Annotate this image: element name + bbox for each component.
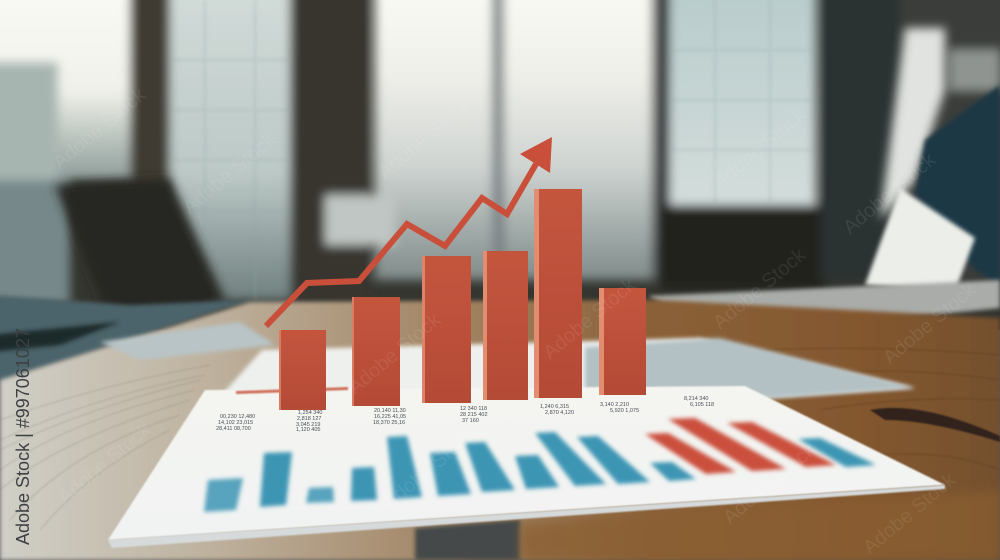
watermark: Adobe Stock — [179, 128, 281, 219]
watermark: Adobe Stock — [539, 273, 641, 364]
paper table of figures: 28 215 402 — [460, 412, 488, 418]
wood knot — [870, 408, 1000, 442]
watermark: Adobe Stock — [859, 468, 961, 559]
bar 2 — [352, 297, 400, 406]
watermark: Adobe Stock — [374, 93, 476, 184]
wooden table — [0, 300, 1000, 560]
paper table of figures — [216, 396, 714, 433]
window grid lines — [170, 0, 815, 300]
watermark: Adobe Stock — [709, 103, 811, 194]
window wall background — [0, 0, 1000, 330]
paper table of figures: 6,105 118 — [690, 402, 714, 408]
paper table of figures: 3,045 219 — [296, 422, 320, 428]
dark wood foreground patch — [415, 520, 520, 560]
paper table of figures: 16,225 41,05 — [374, 414, 406, 420]
laptop base — [648, 280, 1000, 332]
watermark: Adobe Stock — [49, 83, 151, 174]
paper table of figures: 2,818 127 — [297, 416, 321, 422]
paper bar chart — [204, 432, 876, 512]
bar 3 — [422, 256, 471, 403]
bar 6 — [599, 288, 646, 395]
paper table of figures: 12 340 118 — [460, 406, 487, 412]
dark chair silhouette — [55, 178, 225, 322]
bright light blob on right — [880, 28, 945, 220]
small notepaper behind chart — [100, 322, 275, 360]
3D bars — [279, 189, 646, 410]
paper table of figures: 37 160 — [462, 418, 479, 424]
laptop screen — [915, 85, 1000, 285]
paper table of figures: 18,370 25,16 — [373, 420, 405, 426]
watermark: Adobe Stock — [719, 438, 821, 529]
watermark: Adobe Stock — [379, 423, 481, 514]
paper red bars — [645, 418, 836, 474]
paper table of figures: 1,240 6,315 — [540, 404, 569, 410]
watermark: Adobe Stock — [839, 148, 941, 239]
paper table of figures: 2,870 4,120 — [545, 410, 574, 416]
watermark: Adobe Stock — [709, 243, 811, 334]
paper table of figures: 28,411 08,700 — [216, 426, 251, 432]
watermark: Adobe Stock — [54, 418, 156, 509]
paper table of figures: 20,140 11,30 — [374, 408, 406, 414]
back document — [210, 338, 915, 408]
white sheet by laptop — [865, 188, 975, 292]
main paper report — [108, 386, 945, 548]
paper table of figures: 5,920 1,075 — [610, 408, 639, 414]
watermark — [49, 83, 981, 559]
left blue floor area — [0, 295, 250, 385]
bar 4 — [483, 251, 528, 400]
paper table of figures: 14,102 23,015 — [218, 420, 253, 426]
paper table of figures: 00,230 12,480 — [220, 414, 255, 420]
rising trend arrow — [266, 137, 552, 326]
paper red header strip — [236, 387, 348, 394]
paper table of figures: 1,254 340 — [298, 410, 322, 416]
paper table of figures: 3,140 2,210 — [600, 402, 629, 408]
watermark: Adobe Stock — [344, 308, 446, 399]
watermark: Adobe Stock — [879, 278, 981, 369]
bar 5 — [534, 189, 582, 398]
paper table of figures: 8,214 340 — [684, 396, 708, 402]
side credit text: Adobe Stock | #997061027 — [13, 328, 33, 545]
paper table of figures: 1,120 405 — [296, 427, 320, 433]
bar 1 — [279, 330, 326, 410]
